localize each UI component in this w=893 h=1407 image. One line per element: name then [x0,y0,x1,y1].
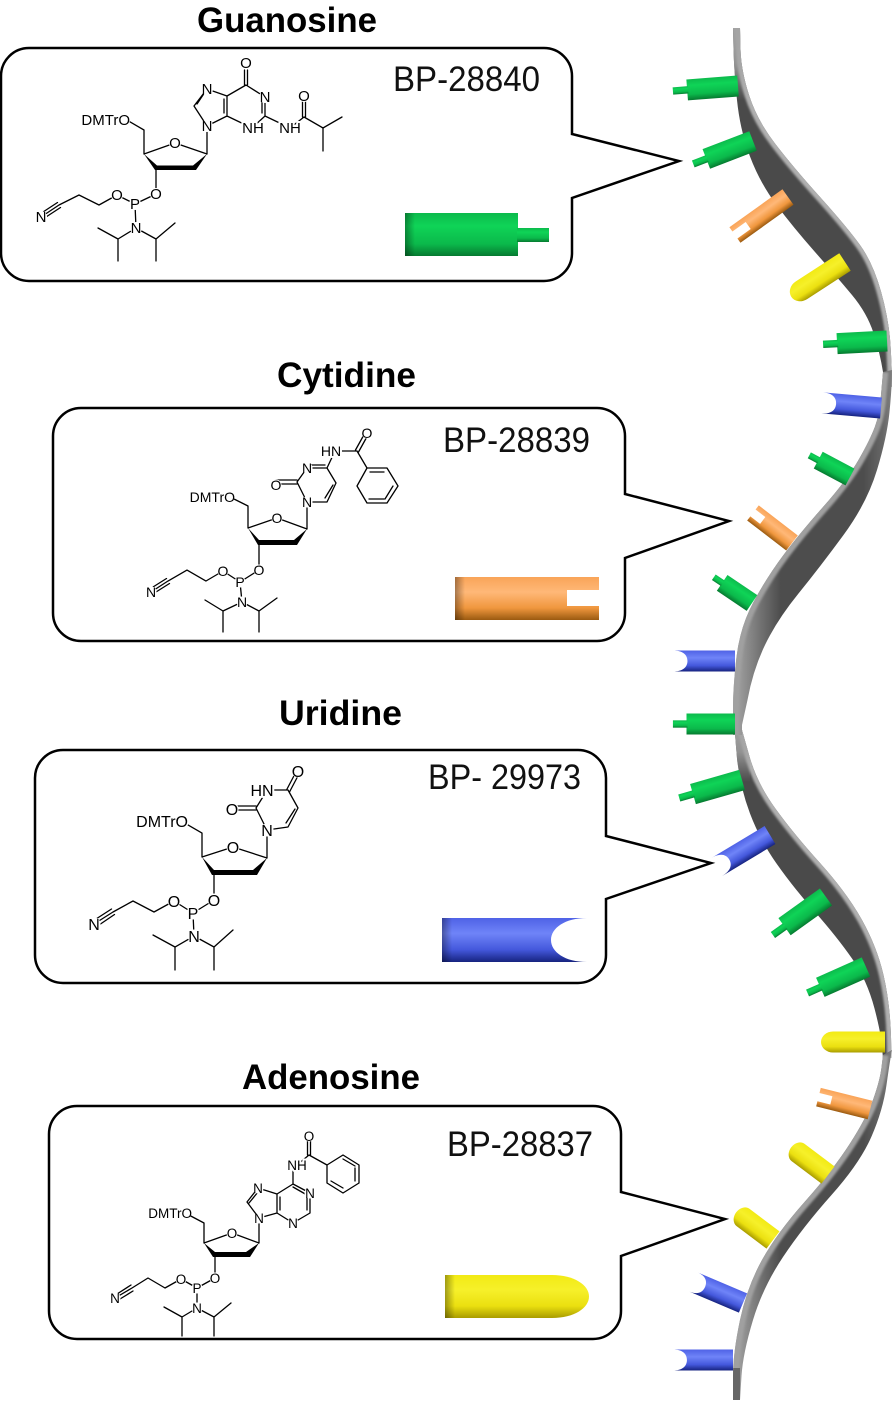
structure: cytidine phosphoramidite: N [146,584,156,600]
panel: Guanosine [1,1,679,281]
structure: adenosine phosphoramidite: N [110,1291,120,1306]
structure: guanosine phosphoramidite: NH [242,120,264,137]
structure: adenosine phosphoramidite: O [176,1272,186,1287]
structure: guanosine phosphoramidite: N [260,89,270,106]
structure: uridine phosphoramidite: O [208,893,220,910]
structure: cytidine phosphoramidite: O [272,510,283,526]
base 3: cytosine [729,189,794,243]
structure: uridine phosphoramidite: O [226,802,238,819]
structure: guanosine phosphoramidite: N [36,209,46,226]
legend shape: orange cytosine block [455,577,599,620]
callout box: Uridine [35,750,711,983]
structure: adenosine phosphoramidite: O [304,1129,314,1144]
structure: uridine phosphoramidite: N [188,929,200,946]
panel: Adenosine [49,1058,725,1339]
catalog number BP-28839: BP-28839 [443,421,590,460]
structure: adenosine phosphoramidite: O [210,1271,220,1286]
base 20: uracil [689,1272,747,1313]
structure: uridine phosphoramidite: DMTrO [136,814,188,831]
structure: guanosine phosphoramidite: O [111,187,123,204]
base 16: adenine [821,1032,885,1052]
structure: uridine phosphoramidite [88,764,304,970]
heading: Guanosine: Guanosine [197,1,377,40]
base 6: uracil [821,392,882,418]
legend shape: green guanine block [405,213,549,256]
structure: cytidine phosphoramidite: N [302,460,312,476]
base 7: guanine [805,447,854,485]
structure: guanosine phosphoramidite: O [240,55,252,72]
callout box: Guanosine [1,48,679,281]
structure: adenosine phosphoramidite: N [253,1181,263,1196]
structure: cytidine phosphoramidite: O [254,562,265,578]
structure: guanosine phosphoramidite: O [298,88,310,105]
helix backbone ribbon [725,20,893,1405]
base 19: adenine [730,1204,779,1249]
base 9: guanine [708,569,757,611]
panel: Uridine [35,694,711,983]
panel: Cytidine [53,356,729,641]
callout box: Adenosine [49,1106,725,1339]
structure: guanosine phosphoramidite: N [131,220,141,237]
heading: Adenosine: Adenosine [242,1058,420,1097]
structure: cytidine phosphoramidite: N [237,594,247,610]
callout box: Cytidine [53,408,729,641]
structure: uridine phosphoramidite: N [261,823,273,840]
base 2: guanine [689,131,757,174]
structure: adenosine phosphoramidite: NH [287,1158,307,1173]
structure: cytidine phosphoramidite: P [235,574,245,590]
structure: adenosine phosphoramidite: N [288,1216,298,1231]
structure: adenosine phosphoramidite [110,1129,359,1336]
structure: uridine phosphoramidite: O [227,840,239,857]
base 17: cytosine [816,1088,872,1119]
structure: adenosine phosphoramidite: N [254,1211,264,1226]
structure: cytidine phosphoramidite: N [302,494,312,510]
base 18: adenine [785,1139,834,1184]
structure: cytidine phosphoramidite [146,425,398,632]
base 4: adenine [786,253,851,306]
structure: guanosine phosphoramidite [36,55,342,261]
heading: Uridine: Uridine [279,694,402,733]
legend shape: yellow adenine block [445,1275,589,1318]
base 13: uracil [711,826,775,876]
base 21: uracil [673,1350,733,1370]
structure: guanosine phosphoramidite: O [169,135,181,152]
structure: guanosine phosphoramidite: N [202,118,212,135]
structure: cytidine phosphoramidite: O [362,425,373,441]
structure: guanosine phosphoramidite: O [150,186,162,203]
catalog number BP-28837: BP-28837 [447,1125,593,1164]
structure: cytidine phosphoramidite: O [218,563,229,579]
structure: adenosine phosphoramidite: N [305,1186,315,1201]
legend shape: blue uracil block [442,918,587,962]
base 5: guanine [823,331,888,355]
structure: uridine phosphoramidite: P [188,906,198,923]
catalog number BP-28840: BP-28840 [393,60,540,99]
base 15: guanine [803,957,870,1003]
structure: uridine phosphoramidite: O [292,764,304,781]
base 8: cytosine [747,505,798,551]
structure: guanosine phosphoramidite: N [202,81,212,98]
structure: cytidine phosphoramidite: DMTrO [190,489,235,505]
base 12: guanine [676,770,745,808]
base 11: guanine [673,714,735,734]
heading: Cytidine: Cytidine [277,356,416,395]
structure: guanosine phosphoramidite: P [130,196,140,213]
structure: cytidine phosphoramidite: HN [321,443,341,459]
structure: cytidine phosphoramidite: O [271,477,282,493]
structure: uridine phosphoramidite: HN [250,783,274,800]
structure: adenosine phosphoramidite: O [227,1226,237,1241]
base 10: uracil [673,650,735,672]
structure: adenosine phosphoramidite: N [192,1301,202,1316]
structure: guanosine phosphoramidite: DMTrO [81,112,130,129]
structure: guanosine phosphoramidite: NH [279,120,301,137]
structure: adenosine phosphoramidite: P [192,1281,202,1296]
base 14: guanine [767,888,832,944]
structure: uridine phosphoramidite: N [88,917,100,934]
helix bases on the strand [672,76,888,1370]
catalog number BP- 29973: BP- 29973 [428,758,581,797]
base 1: guanine [672,76,739,101]
structure: adenosine phosphoramidite: DMTrO [148,1206,192,1221]
structure: uridine phosphoramidite: O [168,894,180,911]
